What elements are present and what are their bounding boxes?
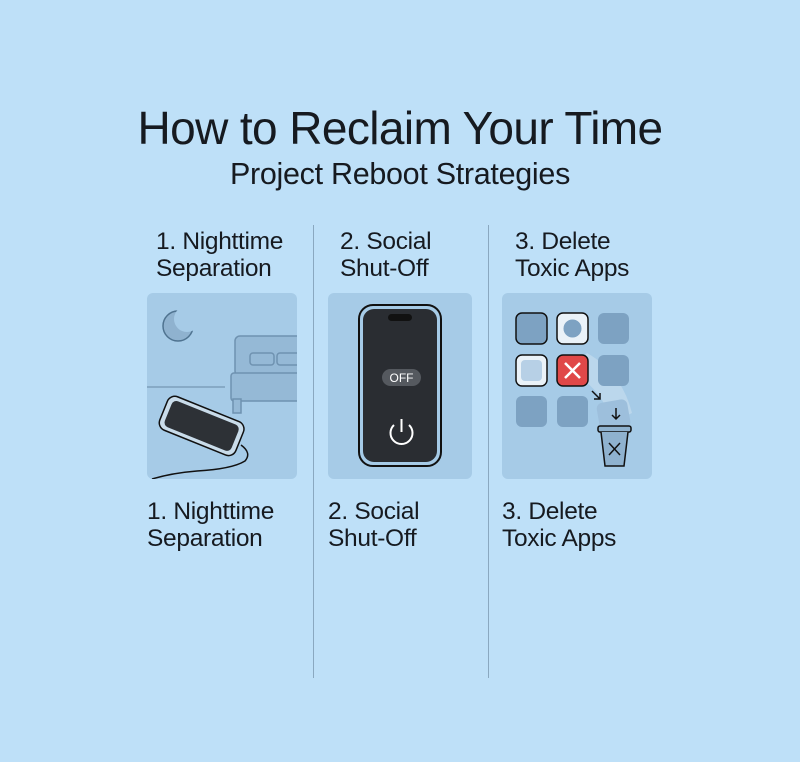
subtitle: Project Reboot Strategies (230, 157, 570, 191)
caption: col 1: Separation (147, 525, 263, 552)
heading: col 1: 1. Nighttime (156, 228, 283, 255)
icon: app grid with trash (516, 313, 632, 466)
heading: col 2: 2. Social (340, 228, 431, 255)
icon: bed (231, 336, 305, 413)
heading: col 2 (340, 228, 431, 282)
heading: col 3: Toxic Apps (515, 255, 629, 282)
caption: col 2: 2. Social (328, 498, 419, 525)
panel: nighttime separation (147, 293, 297, 479)
icon: moon (163, 306, 200, 341)
heading: col 3 (515, 228, 629, 282)
panel: social shut-off (328, 293, 472, 479)
heading: col 2: Shut-Off (340, 255, 428, 282)
caption: col 1: 1. Nighttime (147, 498, 274, 525)
panel: delete toxic apps (502, 293, 652, 479)
icon: charging phone (152, 394, 248, 479)
icon: phone off: OFF (390, 371, 414, 385)
caption: col 3: Toxic Apps (502, 525, 616, 552)
heading: col 1 (156, 228, 283, 282)
caption: col 3: 3. Delete (502, 498, 597, 525)
heading: col 1: Separation (156, 255, 272, 282)
caption: col 2: Shut-Off (328, 525, 416, 552)
title: How to Reclaim Your Time (137, 102, 663, 154)
caption: col 3 (502, 498, 616, 552)
heading: col 3: 3. Delete (515, 228, 610, 255)
caption: col 1 (147, 498, 274, 552)
caption: col 2 (328, 498, 419, 552)
icon: phone off (359, 305, 441, 466)
